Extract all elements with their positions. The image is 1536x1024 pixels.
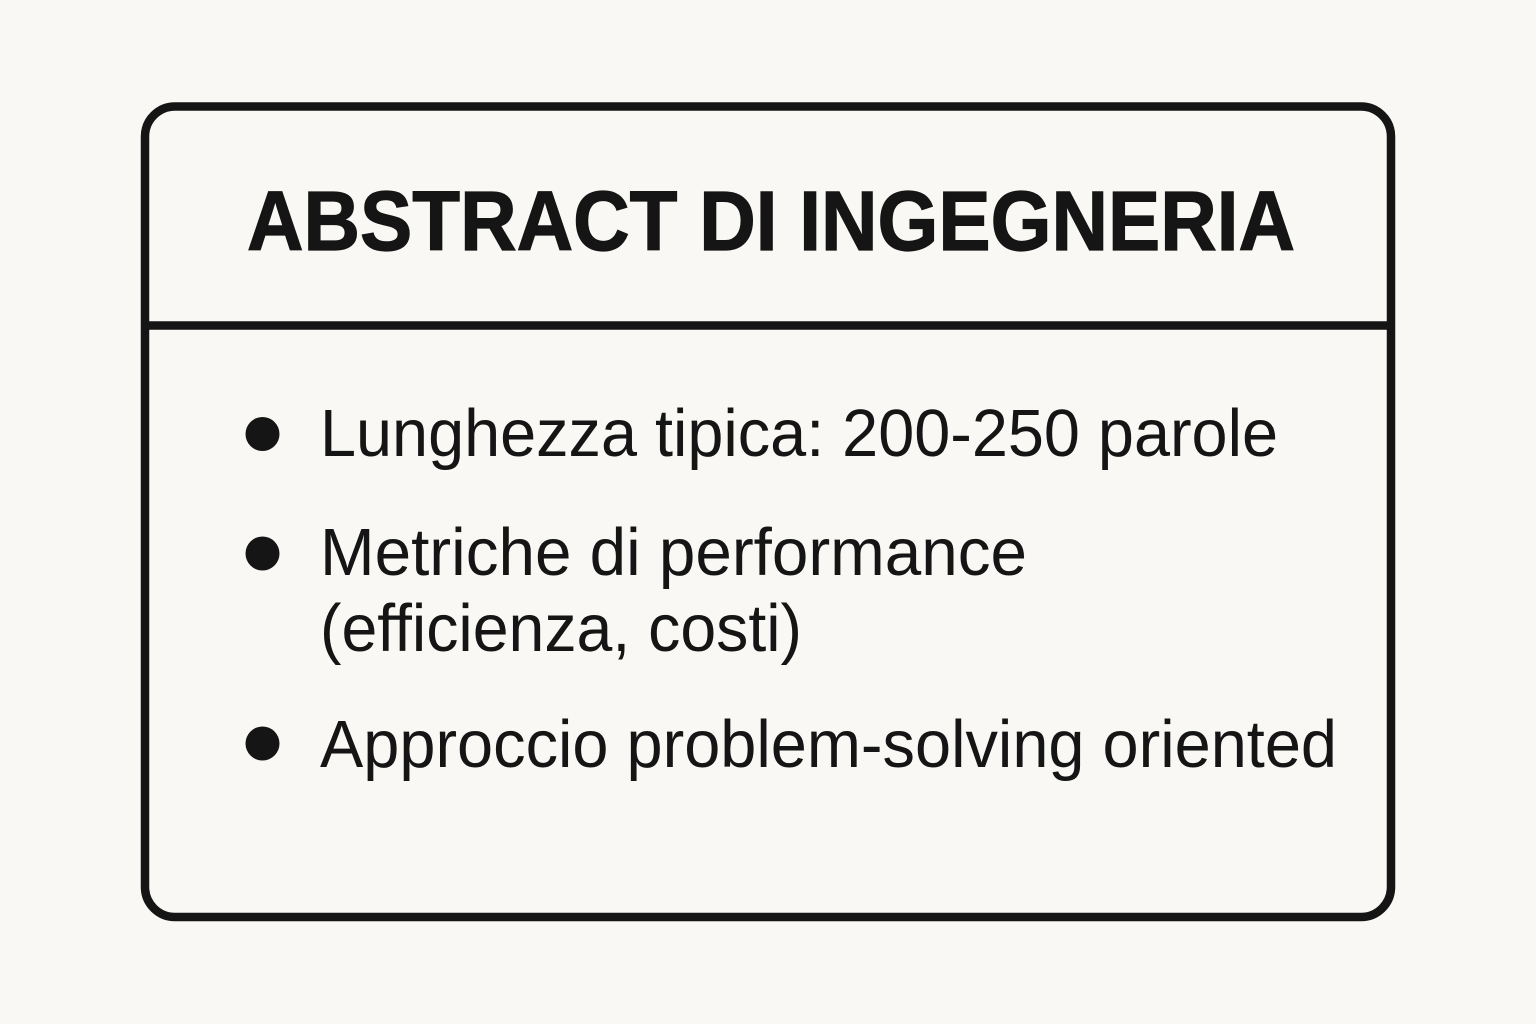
bullet item: metrics <box>246 515 1027 666</box>
bullet item: approach: Approccio problem-solving oriented <box>320 707 1337 782</box>
card: abstract panel <box>145 106 1391 917</box>
bullet list <box>246 396 1337 782</box>
bullet item: metrics: Metriche di performance <box>320 515 1027 590</box>
bullet item: length: Lunghezza tipica: 200-250 parole <box>320 396 1278 471</box>
bullet item: metrics: (efficienza, costi) <box>320 591 802 666</box>
title: ABSTRACT DI INGEGNERIA <box>247 174 1295 268</box>
